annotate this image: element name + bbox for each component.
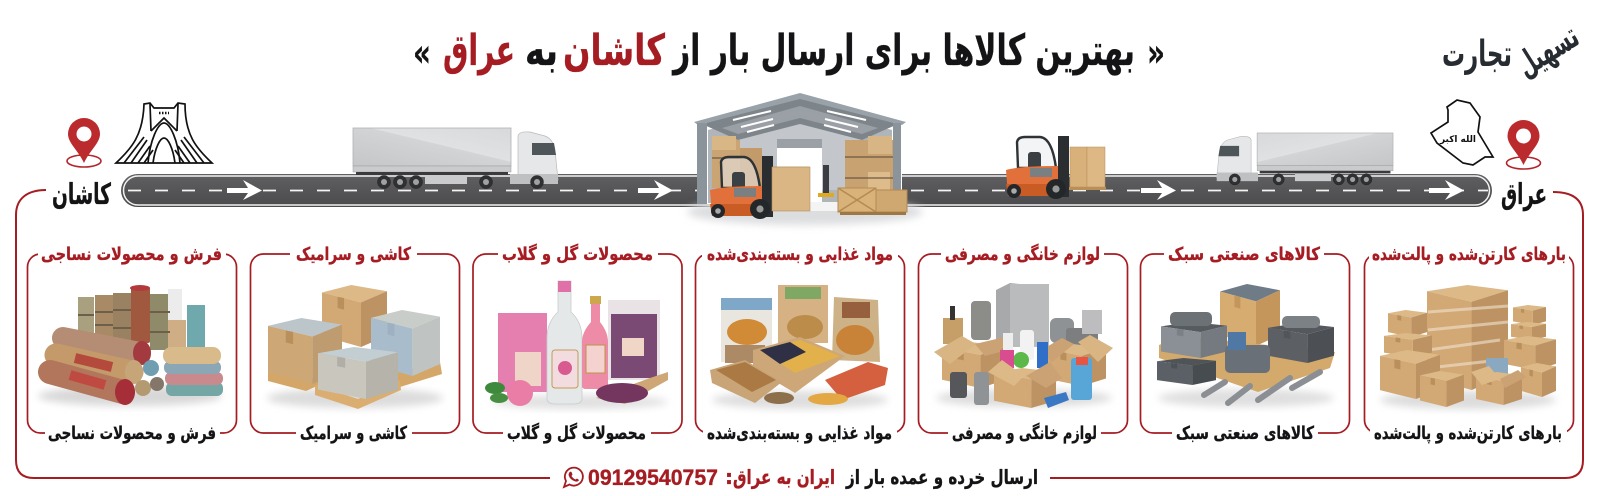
title: کاشان (563, 26, 665, 76)
bottom label: industrial: کالاهای صنعتی سبک (1176, 423, 1314, 444)
panel: rose products (473, 243, 682, 444)
bottom label: carpets: فرش و محصولات نساجی (48, 423, 216, 444)
title: « (413, 31, 431, 75)
crates on forklift (772, 167, 810, 211)
footer contact line: ایران به عراق (733, 465, 835, 489)
panel: cartons and pallets (1364, 243, 1574, 444)
icon: Iraq map (1431, 100, 1493, 165)
icon: whatsapp (564, 468, 583, 487)
title: به (525, 26, 558, 76)
label: Iraq (1497, 177, 1551, 211)
panel: household (918, 243, 1128, 444)
truck: heading to warehouse (353, 128, 558, 188)
title: عراق (443, 26, 515, 76)
bottom label: tile: کاشی و سرامیک (300, 423, 407, 444)
logo: tashil tejarat: تجارت (1442, 34, 1512, 75)
arrow 4 (1429, 180, 1464, 200)
panel: carpets (28, 243, 236, 444)
forklift: warehouse (710, 156, 810, 219)
bottom label: household (948, 422, 1101, 444)
pin: Kashan (67, 118, 101, 167)
illustration: rose water and petals (485, 281, 668, 409)
title (413, 26, 1165, 76)
logo: tashil tejarat (1442, 16, 1586, 85)
illustration: tile pallets (267, 285, 443, 409)
arrow 3 (1141, 180, 1176, 200)
footer contact line (564, 465, 1038, 490)
title: بهترین کالاها برای ارسال بار از (672, 26, 1135, 76)
icon: Azadi tower (116, 103, 212, 163)
bottom label: rose: محصولات گل و گلاب (507, 422, 646, 444)
illustration: appliances in boxes (934, 283, 1113, 408)
illustration: rolled carpets (38, 285, 223, 406)
arrow 2 (638, 180, 673, 200)
top heading: household: لوازم خانگی و مصرفی (945, 243, 1100, 265)
warehouse (687, 93, 923, 225)
top heading: rose: محصولات گل و گلاب (502, 243, 653, 265)
top heading: food: مواد غذایی و بسته‌بندی‌شده (707, 244, 893, 265)
top heading: tile: کاشی و سرامیک (296, 244, 411, 265)
bottom label: household: لوازم خانگی و مصرفی (952, 422, 1097, 444)
footer contact line: 09129540757 (588, 465, 718, 490)
panel: tile and ceramic (250, 243, 460, 444)
road (121, 174, 1492, 207)
footer contact line: : (725, 465, 733, 489)
title: » (1147, 31, 1165, 75)
illustration: metal parts on pallets (1157, 284, 1335, 407)
pin: Iraq (1506, 120, 1540, 169)
arrow 1 (227, 180, 262, 200)
top heading: industrial: کالاهای صنعتی سبک (1168, 244, 1320, 265)
forklift: road (1006, 136, 1106, 199)
footer contact line: ارسال خرده و عمده بار از (845, 465, 1038, 489)
label: Iraq: عراق (1501, 177, 1547, 211)
illustration: cardboard boxes (1380, 285, 1556, 409)
truck: heading to Iraq (1217, 133, 1393, 185)
panel: light industrial (1140, 243, 1350, 444)
outer route frame (16, 190, 1583, 478)
label: Kashan (46, 177, 118, 211)
bottom label: food: مواد غذایی و بسته‌بندی‌شده (707, 423, 892, 444)
panel: food (696, 243, 904, 444)
top heading: carpets: فرش و محصولات نساجی (41, 244, 222, 265)
label: Kashan: کاشان (52, 177, 111, 211)
illustration: packaged food (710, 285, 888, 409)
icon: Iraq map: الله اکبر (1439, 135, 1476, 145)
